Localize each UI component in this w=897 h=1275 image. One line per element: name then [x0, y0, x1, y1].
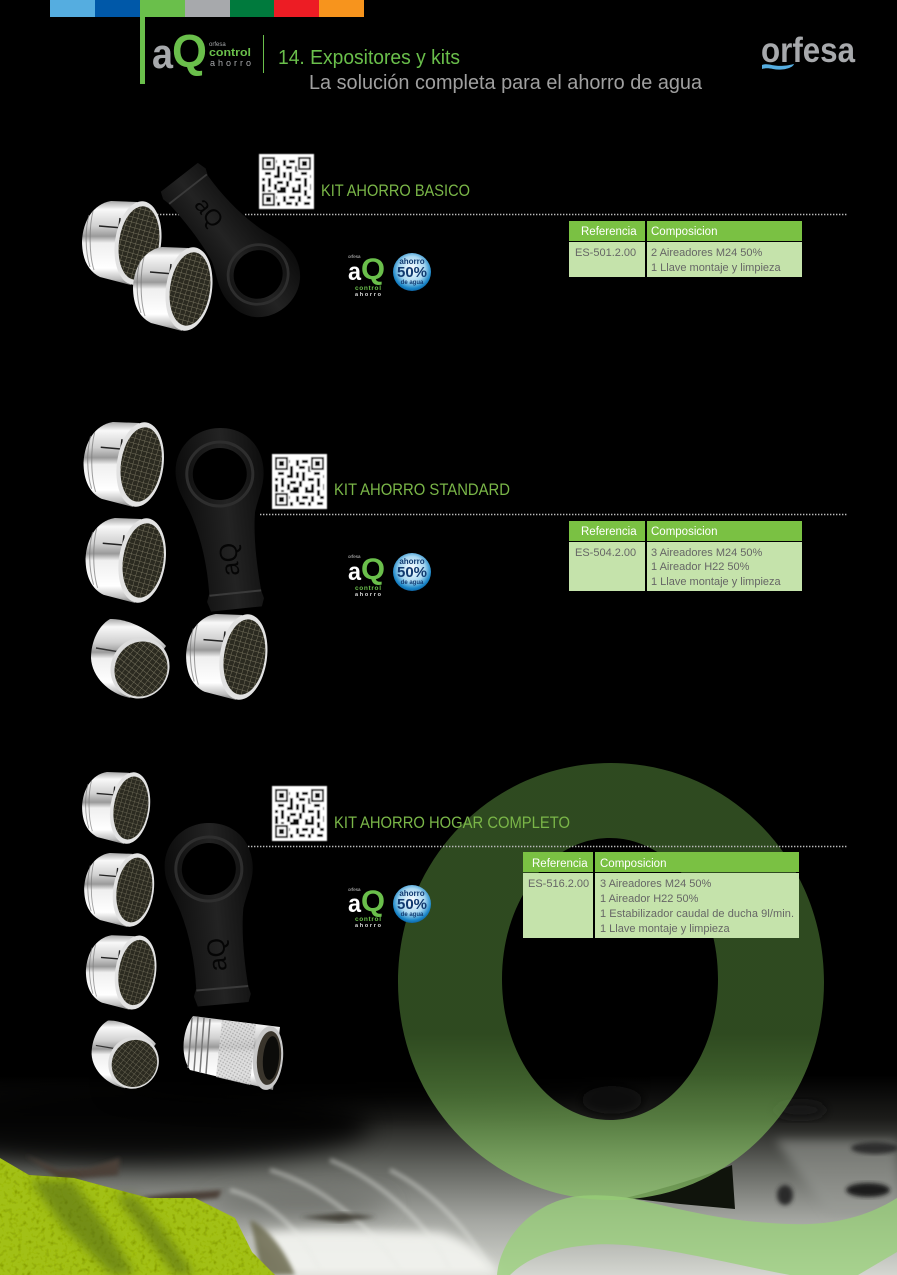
background photo: river and moss	[0, 1065, 897, 1275]
icon: dome aerator	[92, 1021, 168, 1098]
badge: ahorro 50% de agua: ahorro	[399, 557, 425, 566]
aQ control ahorro logo: a	[348, 890, 362, 918]
table: ES-504.2.00: 3 Aireadores M24 50%	[651, 547, 763, 559]
icon: aerator 1	[84, 419, 169, 510]
aQ control ahorro logo: ahorro	[355, 292, 382, 298]
aQ control ahorro logo: control	[355, 285, 381, 292]
icon: aerator 3	[186, 611, 273, 703]
aQ control ahorro logo: orfesa	[348, 254, 361, 259]
badge: ahorro 50% de agua	[393, 253, 431, 291]
badge: ahorro 50% de agua: ahorro	[399, 889, 425, 898]
header aQ logo	[152, 25, 251, 77]
badge: ahorro 50% de agua: de agua	[401, 280, 424, 286]
table: ES-516.2.00: 1 Estabilizador caudal de ducha 9l/min.	[600, 908, 794, 920]
icon: aerator 3	[86, 933, 161, 1012]
icon: mounting key	[149, 151, 316, 333]
header aQ logo: control	[209, 47, 251, 59]
QR code	[272, 786, 327, 841]
table: ES-501.2.00: 1 Llave montaje y limpieza	[651, 262, 782, 274]
table: ES-516.2.00: ES-516.2.00	[528, 878, 589, 890]
aQ control ahorro logo: control	[355, 585, 381, 592]
icon: mounting key	[161, 819, 265, 1008]
header divider	[263, 35, 264, 73]
QR code	[259, 154, 314, 209]
icon: aerator 1	[82, 198, 167, 288]
header aQ logo: orfesa	[209, 42, 226, 48]
badge: ahorro 50% de agua: de agua	[401, 912, 424, 918]
header aQ logo: Q	[172, 25, 207, 77]
icon: aerator 1	[82, 770, 155, 846]
header aQ logo: a	[152, 30, 174, 77]
badge: ahorro 50% de agua	[393, 553, 431, 591]
aQ control ahorro logo: Q	[361, 553, 385, 586]
panel: kit ahorro basico	[82, 151, 802, 334]
table: ES-516.2.00: 3 Aireadores M24 50%	[600, 878, 712, 890]
table: ES-516.2.00: 1 Aireador H22 50%	[600, 893, 699, 905]
table: ES-501.2.00: ES-501.2.00	[575, 247, 636, 259]
aQ control ahorro logo: ahorro	[355, 923, 382, 929]
table: ES-504.2.00: 1 Aireador H22 50%	[651, 561, 750, 573]
section subtitle: La solución completa para el ahorro de agua	[309, 72, 703, 94]
table: ES-504.2.00: 1 Llave montaje y limpieza	[651, 576, 782, 588]
heading: KIT AHORRO HOGAR COMPLETO	[334, 813, 570, 832]
table: ES-501.2.00: Composicion	[651, 226, 717, 238]
icon: aerator 2	[84, 851, 159, 929]
aQ control ahorro logo: orfesa	[348, 887, 361, 892]
divider: kit standard	[260, 514, 847, 516]
table: ES-516.2.00	[523, 852, 799, 938]
table: ES-504.2.00: Referencia	[581, 526, 637, 538]
badge: ahorro 50% de agua: 50%	[397, 896, 427, 913]
badge: ahorro 50% de agua: 50%	[397, 564, 427, 581]
aQ control ahorro logo: Q	[361, 253, 385, 286]
orfesa logo: orfesa	[761, 31, 855, 70]
divider: kit hogar	[245, 846, 847, 848]
divider: kit basico	[157, 214, 847, 216]
aQ control ahorro logo: a	[348, 558, 362, 586]
table: ES-504.2.00	[569, 521, 802, 591]
aQ control ahorro logo	[348, 253, 385, 298]
panel: kit ahorro standard	[84, 419, 802, 709]
large translucent Q watermark	[398, 763, 897, 1275]
aQ control ahorro logo: a	[348, 258, 362, 286]
icon: shower flow stabilizer	[184, 1016, 286, 1091]
table: ES-501.2.00	[569, 221, 802, 277]
icon: aerator 2	[133, 244, 218, 334]
table: ES-516.2.00: Composicion	[600, 858, 666, 870]
QR code	[272, 454, 327, 509]
aQ control ahorro logo: orfesa	[348, 554, 361, 559]
top colour bar	[50, 0, 364, 84]
icon: dome aerator	[91, 619, 181, 709]
table: ES-501.2.00: Referencia	[581, 226, 637, 238]
panel: kit ahorro hogar completo	[82, 770, 799, 1098]
table: ES-516.2.00: 1 Llave montaje y limpieza	[600, 923, 731, 935]
badge: ahorro 50% de agua	[393, 885, 431, 923]
table: ES-516.2.00: Referencia	[532, 858, 588, 870]
aQ control ahorro logo: control	[355, 916, 381, 923]
header aQ logo: ahorro	[210, 58, 251, 68]
badge: ahorro 50% de agua: 50%	[397, 264, 427, 281]
badge: ahorro 50% de agua: de agua	[401, 580, 424, 586]
aQ control ahorro logo	[348, 553, 385, 598]
heading: KIT AHORRO STANDARD	[334, 480, 510, 499]
heading: KIT AHORRO BASICO	[321, 181, 470, 200]
section title: 14. Expositores y kits	[278, 47, 460, 69]
aQ control ahorro logo	[348, 885, 385, 929]
aQ control ahorro logo: ahorro	[355, 592, 382, 598]
badge: ahorro 50% de agua: ahorro	[399, 257, 425, 266]
table: ES-501.2.00: 2 Aireadores M24 50%	[651, 247, 763, 259]
aQ control ahorro logo: Q	[361, 885, 385, 918]
icon: aerator 2	[86, 515, 171, 606]
icon: mounting key	[171, 424, 278, 614]
table: ES-504.2.00: ES-504.2.00	[575, 547, 636, 559]
table: ES-504.2.00: Composicion	[651, 526, 717, 538]
